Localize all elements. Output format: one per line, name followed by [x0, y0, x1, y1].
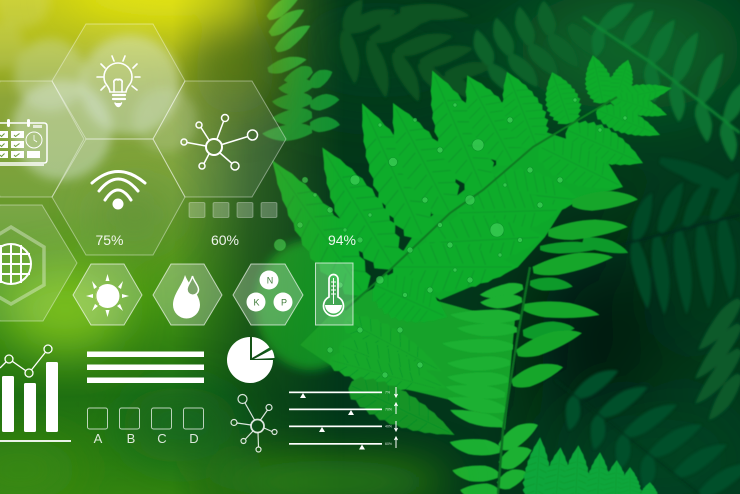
icon: N K P circles: N — [267, 276, 273, 286]
hexagon: network — [153, 81, 286, 197]
option boxes A B C D: B — [127, 431, 135, 446]
icon: thermometer — [323, 274, 343, 316]
option boxes A B C D — [88, 408, 204, 446]
slider chart: 70% — [385, 408, 392, 412]
icon: sun — [86, 274, 129, 317]
slider chart — [289, 387, 398, 450]
network diagram — [231, 394, 277, 452]
hexagon: globe — [0, 205, 77, 321]
small upper fern at top-left of foliage — [262, 0, 341, 143]
dark background fronds — [337, 0, 740, 494]
narrow-leaf fern frond — [442, 190, 638, 494]
hexagon: N K P nutrients — [233, 264, 303, 325]
main fern frond — [252, 52, 674, 339]
hexagon: calendar — [0, 81, 84, 197]
icon: N K P circles — [246, 270, 292, 312]
icon: N K P circles: P — [281, 298, 287, 308]
water droplets on frond — [274, 98, 627, 378]
pie chart — [227, 337, 274, 383]
bottom fern frond — [521, 436, 661, 494]
percentages — [95, 232, 356, 248]
icon: network nodes — [181, 114, 258, 170]
panel: thermometer — [316, 263, 353, 325]
bar and line chart — [0, 345, 71, 442]
option boxes A B C D: C — [157, 431, 167, 446]
bokeh light circles — [0, 0, 197, 180]
slider chart: 60% — [385, 442, 392, 446]
percentages: 94% — [328, 232, 356, 248]
hexagon: light bulb — [52, 24, 185, 139]
icon: light bulb — [97, 56, 140, 106]
text lines — [87, 352, 204, 383]
green foliage glow behind fronds — [255, 240, 365, 370]
hexagon: wifi — [52, 139, 185, 255]
percentages: 60% — [211, 232, 239, 248]
hexagon: water drops — [153, 264, 222, 325]
progress squares — [189, 202, 277, 218]
percentages: 75% — [95, 232, 124, 248]
hexagon: sun — [73, 264, 142, 325]
icon: N K P circles: K — [253, 298, 260, 308]
slider chart: 40% — [385, 424, 392, 428]
option boxes A B C D: D — [189, 431, 199, 446]
icon: calendar and clock — [0, 119, 47, 165]
icon: water drops — [173, 275, 200, 318]
soft green-yellow haze on the left — [0, 0, 450, 494]
slider chart: 7% — [385, 390, 390, 394]
option boxes A B C D: A — [94, 431, 103, 446]
lower frond — [300, 285, 515, 452]
icon: globe in hexagon — [0, 227, 44, 304]
icon: wifi — [92, 172, 145, 210]
